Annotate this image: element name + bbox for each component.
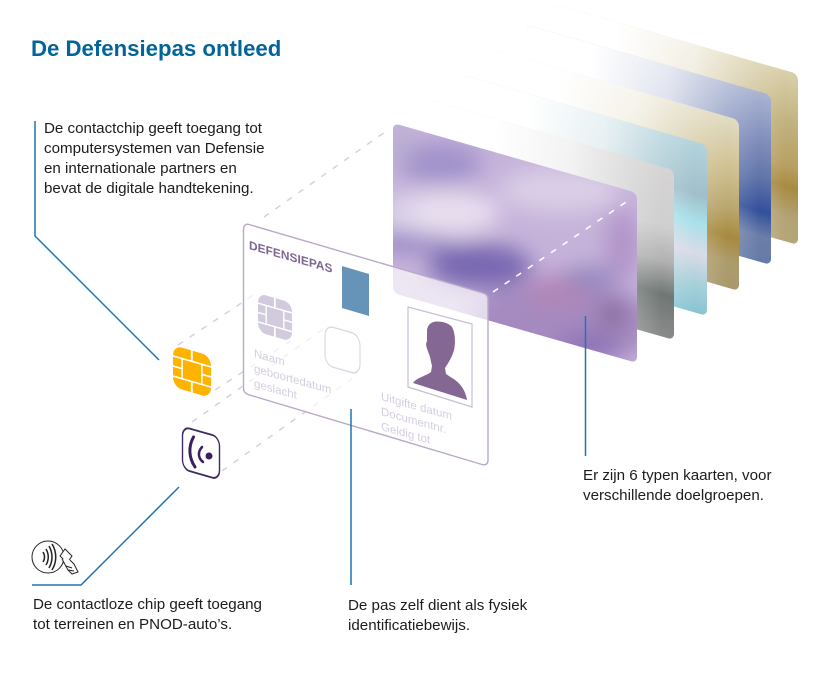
blue stripe (342, 266, 369, 316)
callout text: contact chip: De contactchip geeft toegang tot (44, 120, 263, 137)
callout text: contact chip (44, 120, 264, 197)
personal data right: Geldig tot (381, 420, 431, 447)
personal data left (254, 347, 331, 402)
icon: contactless chip (182, 426, 220, 480)
back card: light blue (463, 75, 707, 316)
callout text: the card: De pas zelf dient als fysiek (348, 597, 528, 614)
callout text: contact chip: computersystemen van Defensie (44, 140, 264, 157)
back card: grey (430, 100, 674, 340)
icon: contactless payment hand (32, 541, 78, 574)
title: De Defensiepas ontleed (31, 36, 281, 61)
front card: purple (393, 124, 637, 362)
portrait silhouette (413, 322, 467, 400)
personal data right (381, 390, 452, 447)
personal data left: Naam (254, 347, 285, 369)
callout text: contact chip: en internationale partners en (44, 160, 237, 177)
personal data right: Uitgifte datum (381, 390, 452, 423)
callout line: contact chip (35, 121, 159, 360)
ID card: DEFENSIEPAS (244, 224, 488, 465)
callout text: card types: verschillende doelgroepen. (583, 487, 764, 504)
card stack: six card types (393, 6, 798, 362)
photo frame (408, 307, 472, 407)
white dashed line over card (493, 198, 632, 292)
card name: DEFENSIEPAS (249, 238, 333, 276)
callout text: card types (583, 467, 772, 504)
callout text: contactless chip (33, 596, 262, 633)
callout text: the card (348, 597, 528, 634)
callout text: card types: Er zijn 6 typen kaarten, voor (583, 467, 772, 484)
callout text: contactless chip: De contactloze chip geeft toegang (33, 596, 262, 613)
callout text: the card: identificatiebewijs. (348, 617, 470, 634)
callout line: contactless chip (32, 487, 179, 585)
personal data left: geslacht (254, 377, 298, 402)
back card: blue (527, 25, 771, 265)
personal data right: Documentnr. (381, 405, 446, 436)
callout text: contactless chip: tot terreinen en PNOD-auto’s. (33, 616, 232, 633)
callout line: the card (350, 409, 352, 585)
back card: gold (554, 4, 798, 245)
contactless area outline (325, 325, 360, 375)
ghost chip (258, 293, 292, 342)
back card: pale gold (495, 50, 739, 291)
icon: contact chip (173, 345, 211, 398)
personal data left: geboortedatum (254, 362, 331, 397)
dashed guide lines (178, 132, 385, 471)
callout line: card types (584, 316, 586, 456)
callout text: contact chip: bevat de digitale handtekening. (44, 180, 254, 197)
